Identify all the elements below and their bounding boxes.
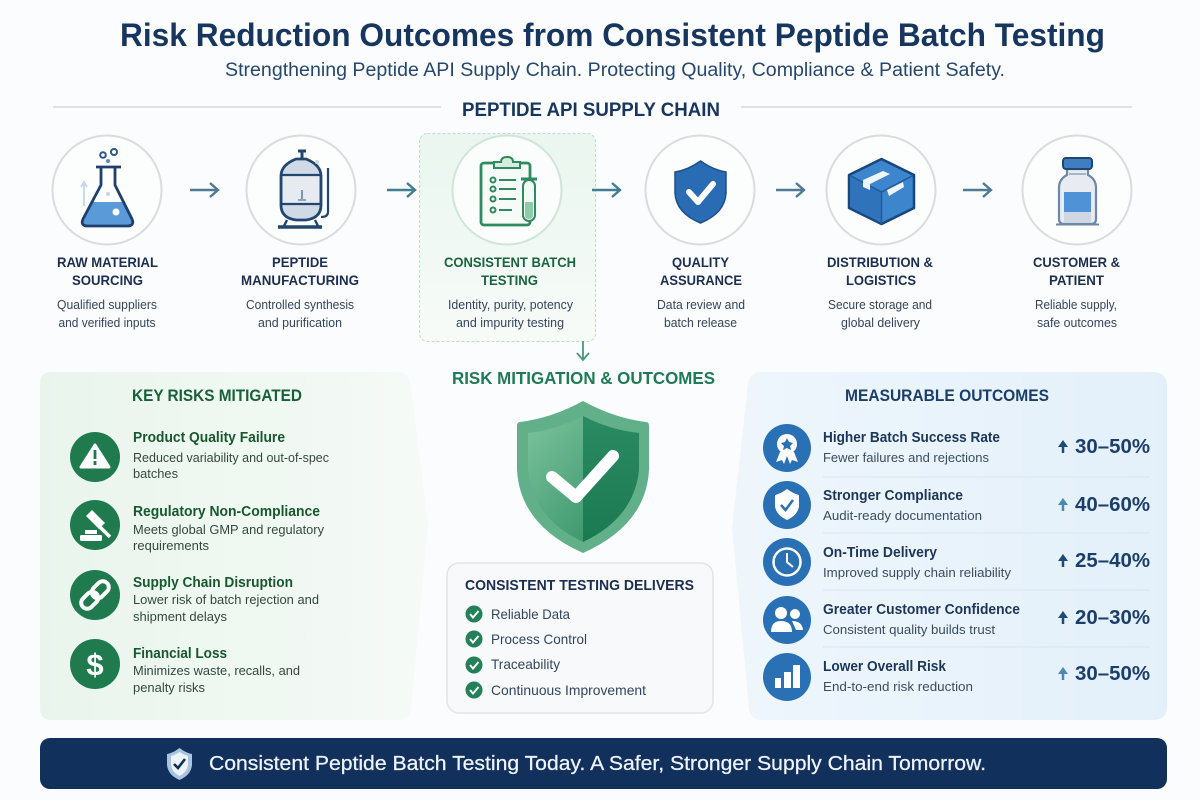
heading: supply chain: PEPTIDE API SUPPLY CHAIN [462, 99, 720, 121]
risk: regulatory non-compliance: requirements [133, 538, 209, 553]
risk: financial loss: Financial Loss [133, 646, 227, 662]
risk: product quality failure: batches [133, 466, 178, 481]
footer text: Consistent Peptide Batch Testing Today. A Safer, Stronger Supply Chain Tomorrow. [209, 753, 986, 775]
outcome: stronger compliance: Audit-ready documentation [823, 508, 982, 523]
outcome: stronger compliance: Stronger Compliance [823, 488, 963, 504]
risk: financial loss: penalty risks [133, 680, 205, 695]
panel: consistent testing delivers [447, 563, 713, 713]
step: peptide manufacturing [241, 136, 359, 330]
arrow [776, 183, 804, 197]
step description: Data review and [657, 298, 745, 312]
item: continuous improvement: Continuous Improvement [491, 682, 646, 698]
step description [657, 298, 745, 330]
outcome: lower overall risk: 30–50% [1075, 662, 1150, 685]
arrow [963, 183, 991, 197]
icon: blue shield [675, 161, 726, 223]
outcome: on-time delivery [763, 538, 1150, 586]
step description [828, 298, 932, 330]
outcome: greater customer confidence: 20–30% [1075, 606, 1150, 629]
step title [1033, 254, 1120, 288]
icon: large green shield [517, 401, 649, 553]
icon: reactor tank [278, 151, 328, 227]
risk: product quality failure: Product Quality Failure [133, 430, 285, 446]
title: Risk Reduction Outcomes from Consistent Peptide Batch Testing [120, 17, 1105, 53]
step: raw material sourcing [52, 136, 162, 330]
step description: Qualified suppliers [57, 298, 157, 312]
icon: vial [1056, 158, 1099, 224]
step title: CUSTOMER & [1033, 254, 1120, 270]
step title [827, 254, 933, 288]
outcome: lower overall risk: End-to-end risk reduction [823, 679, 973, 694]
risk: regulatory non-compliance: Meets global GMP and regulatory [133, 522, 324, 537]
outcome: greater customer confidence: Consistent quality builds trust [823, 622, 995, 637]
step title: TESTING [481, 272, 538, 288]
step title [444, 254, 576, 288]
card heading: CONSISTENT TESTING DELIVERS [465, 577, 694, 594]
outcome: greater customer confidence [763, 596, 1150, 644]
risk: financial loss [70, 639, 300, 695]
step description: Controlled synthesis [246, 298, 354, 312]
risk: product quality failure [70, 430, 329, 482]
icon: flask [80, 149, 136, 228]
subtitle: Strengthening Peptide API Supply Chain. Protecting Quality, Compliance & Patient Safety. [225, 60, 1005, 81]
item: process control: Process Control [491, 631, 587, 647]
icon: clipboard and test tube [481, 157, 537, 225]
outcome: on-time delivery: Improved supply chain reliability [823, 565, 1011, 580]
icon: footer shield [167, 748, 192, 780]
panel: key risks mitigated [40, 372, 428, 720]
risk: financial loss: $ [86, 647, 104, 682]
panel: highlighted batch testing box [420, 134, 596, 342]
step title: MANUFACTURING [241, 272, 359, 288]
step title [660, 254, 742, 288]
risk: supply chain disruption: shipment delays [133, 609, 227, 624]
step: consistent batch testing [444, 136, 576, 330]
item: reliable data: Reliable Data [491, 606, 570, 622]
arrow: testing down to outcomes [577, 341, 589, 360]
step title: QUALITY [672, 254, 730, 270]
step description [448, 298, 574, 330]
step title: RAW MATERIAL [57, 254, 158, 270]
step description: global delivery [841, 316, 921, 330]
icon: box [849, 159, 914, 224]
step title [57, 254, 158, 288]
risk: product quality failure: Reduced variability and out-of-spec [133, 450, 329, 465]
arrow [190, 183, 218, 197]
step description: Identity, purity, potency [448, 298, 574, 312]
step description: safe outcomes [1037, 316, 1117, 330]
outcome: higher batch success rate [763, 424, 1150, 472]
step description: Reliable supply, [1035, 298, 1117, 312]
heading: risk mitigation and outcomes: RISK MITIGATION & OUTCOMES [452, 368, 715, 388]
heading: key risks: KEY RISKS MITIGATED [132, 387, 302, 405]
step title [241, 254, 359, 288]
outcome: on-time delivery: On-Time Delivery [823, 545, 937, 561]
outcome: lower overall risk: Lower Overall Risk [823, 659, 947, 675]
step description [57, 298, 157, 330]
step title: SOURCING [72, 272, 143, 288]
item: traceability [466, 656, 560, 674]
risk: supply chain disruption: Supply Chain Disruption [133, 575, 293, 591]
step: distribution and logistics [826, 136, 936, 330]
risk: supply chain disruption: Lower risk of batch rejection and [133, 592, 319, 607]
step description: and purification [258, 316, 342, 330]
outcome: on-time delivery: 25–40% [1075, 549, 1150, 572]
step description: Secure storage and [828, 298, 932, 312]
risk: supply chain disruption [70, 570, 319, 624]
step: customer and patient [1022, 136, 1132, 330]
step: quality assurance [646, 136, 754, 330]
step description [246, 298, 354, 330]
step title: PATIENT [1049, 272, 1104, 288]
step title: ASSURANCE [660, 272, 742, 288]
step title: LOGISTICS [846, 272, 916, 288]
outcome: higher batch success rate: 30–50% [1075, 435, 1150, 458]
footer banner [40, 738, 1167, 789]
step title: DISTRIBUTION & [827, 254, 933, 270]
step description: batch release [664, 316, 737, 330]
arrow [387, 183, 415, 197]
risk: financial loss: Minimizes waste, recalls, and [133, 663, 300, 678]
heading: measurable outcomes: MEASURABLE OUTCOMES [845, 387, 1049, 405]
outcome: lower overall risk [763, 653, 1150, 701]
outcome: greater customer confidence: Greater Customer Confidence [823, 602, 1020, 618]
step title: PEPTIDE [272, 254, 328, 270]
step title: CONSISTENT BATCH [444, 254, 576, 270]
outcome: higher batch success rate: Higher Batch Success Rate [823, 430, 1000, 446]
item: traceability: Traceability [491, 656, 560, 672]
outcome: stronger compliance [763, 481, 1150, 529]
arrow [592, 183, 620, 197]
step description: and impurity testing [456, 316, 564, 330]
panel: measurable outcomes [732, 372, 1167, 720]
step description [1035, 298, 1117, 330]
risk: regulatory non-compliance: Regulatory Non-Compliance [133, 504, 320, 520]
risk: regulatory non-compliance [70, 500, 324, 553]
outcome: higher batch success rate: Fewer failures and rejections [823, 450, 989, 465]
item: reliable data [466, 606, 570, 622]
outcome: stronger compliance: 40–60% [1075, 493, 1150, 516]
step description: and verified inputs [58, 316, 156, 330]
